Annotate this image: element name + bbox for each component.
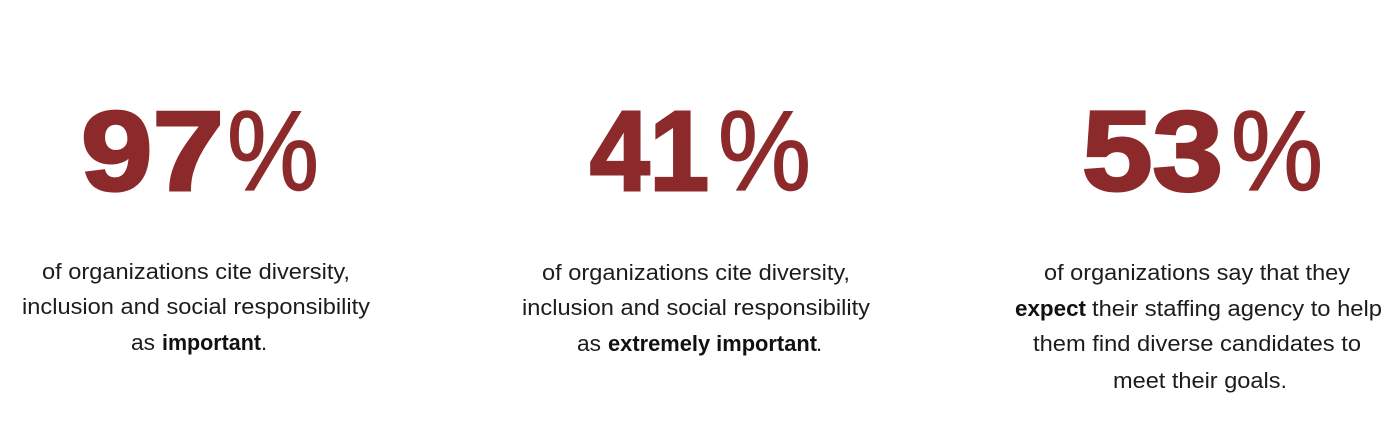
number: 41%	[590, 88, 811, 214]
text: 53% description: meet their goals.	[1113, 368, 1287, 393]
panel: 53% statistic	[1015, 88, 1382, 393]
text: 41% description	[522, 260, 870, 356]
panel: 41% statistic	[522, 88, 870, 356]
text: 41% description: extremely important	[608, 331, 818, 356]
text: 53% description: their staffing agency to help	[1092, 296, 1382, 321]
number: 53%: 53	[1082, 88, 1223, 214]
text: 53% description: expect	[1015, 296, 1087, 321]
number: 41%: 41	[590, 88, 709, 214]
text: 53% description: them find diverse candidates to	[1033, 331, 1361, 356]
panel: 97% statistic	[22, 88, 370, 355]
text: 41% description: as	[577, 331, 601, 356]
number: 41%: %	[718, 88, 811, 214]
text: 97% description	[22, 259, 370, 355]
text: 97% description: inclusion and social responsibility	[22, 294, 370, 319]
number: 53%: %	[1231, 88, 1323, 214]
text: 41% description: of organizations cite diversity,	[542, 260, 850, 285]
text: 41% description: .	[816, 331, 822, 356]
text: 41% description: inclusion and social responsibility	[522, 295, 870, 320]
number: 97%	[81, 88, 319, 214]
number: 97%: %	[227, 88, 319, 214]
text: 97% description: .	[261, 330, 267, 355]
text: 97% description: of organizations cite diversity,	[42, 259, 350, 284]
text: 97% description: important	[162, 330, 262, 355]
text: 53% description	[1015, 260, 1382, 393]
text: 97% description: as	[131, 330, 155, 355]
number: 97%: 97	[81, 88, 224, 214]
number: 53%	[1082, 88, 1323, 214]
text: 53% description: of organizations say that they	[1044, 260, 1350, 285]
